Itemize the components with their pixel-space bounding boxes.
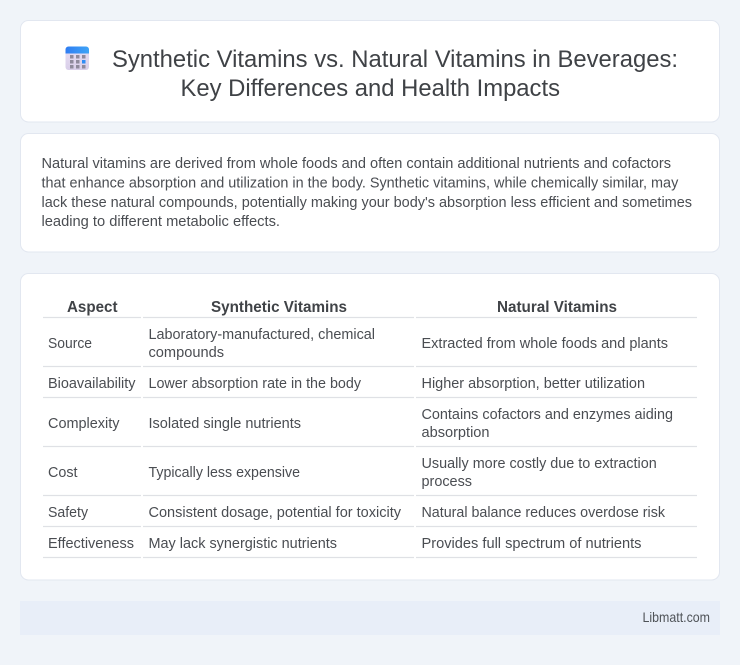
footer bar — [20, 601, 720, 635]
table header row — [67, 299, 617, 316]
row: Source: Laboratory-manufactured, chemical — [148, 327, 375, 343]
intro paragraph: that enhance absorption and utilization in the body. Synthetic vitamins, while chemically similar, may — [42, 176, 679, 192]
panel: introduction — [20, 134, 720, 252]
row: Complexity: Isolated single nutrients — [148, 416, 301, 432]
row: Effectiveness: May lack synergistic nutrients — [148, 536, 337, 552]
footer source text: Libmatt.com — [642, 610, 710, 625]
row: Cost — [48, 456, 657, 490]
intro paragraph — [42, 156, 692, 230]
icon: calendar — [66, 46, 89, 70]
row: Source: Extracted from whole foods and plants — [422, 336, 668, 352]
row: Complexity — [48, 407, 673, 441]
row: Bioavailability: Bioavailability — [48, 376, 136, 392]
table header row: Aspect — [67, 299, 118, 316]
title: Synthetic Vitamins vs. Natural Vitamins in Beverages: — [112, 46, 678, 73]
row: Bioavailability: Higher absorption, better utilization — [422, 376, 645, 392]
row: Bioavailability: Lower absorption rate in the body — [148, 376, 362, 392]
title — [112, 46, 678, 102]
panel: header — [20, 20, 720, 122]
row: Safety: Safety — [48, 505, 89, 521]
row: Safety — [48, 505, 666, 521]
row: Safety: Natural balance reduces overdose risk — [422, 505, 666, 521]
table header row: Natural Vitamins — [497, 299, 617, 316]
row: Effectiveness: Provides full spectrum of nutrients — [422, 536, 642, 552]
row: Cost: Typically less expensive — [148, 465, 300, 481]
title: Key Differences and Health Impacts — [180, 75, 560, 102]
row: Complexity: absorption — [422, 425, 490, 441]
intro paragraph: Natural vitamins are derived from whole foods and often contain additional nutrients and cofactors — [42, 156, 671, 172]
row: Source — [48, 327, 668, 361]
row: Effectiveness: Effectiveness — [48, 536, 134, 552]
row: Source: Source — [48, 336, 92, 352]
row: Complexity: Complexity — [48, 416, 120, 432]
row: Cost: process — [422, 474, 472, 490]
row: Bioavailability — [48, 376, 645, 392]
table header row: Synthetic Vitamins — [211, 299, 347, 316]
panel: comparison table — [20, 274, 720, 580]
row: Cost: Cost — [48, 465, 78, 481]
row: Safety: Consistent dosage, potential for toxicity — [148, 505, 402, 521]
intro paragraph: leading to different metabolic effects. — [42, 214, 280, 230]
row: Complexity: Contains cofactors and enzymes aiding — [422, 407, 673, 423]
row: Effectiveness — [48, 536, 642, 552]
row: Source: compounds — [148, 345, 224, 361]
intro paragraph: lack these natural compounds, potentially making your body's absorption less efficient and sometimes — [42, 195, 692, 211]
row: Cost: Usually more costly due to extraction — [422, 456, 657, 472]
